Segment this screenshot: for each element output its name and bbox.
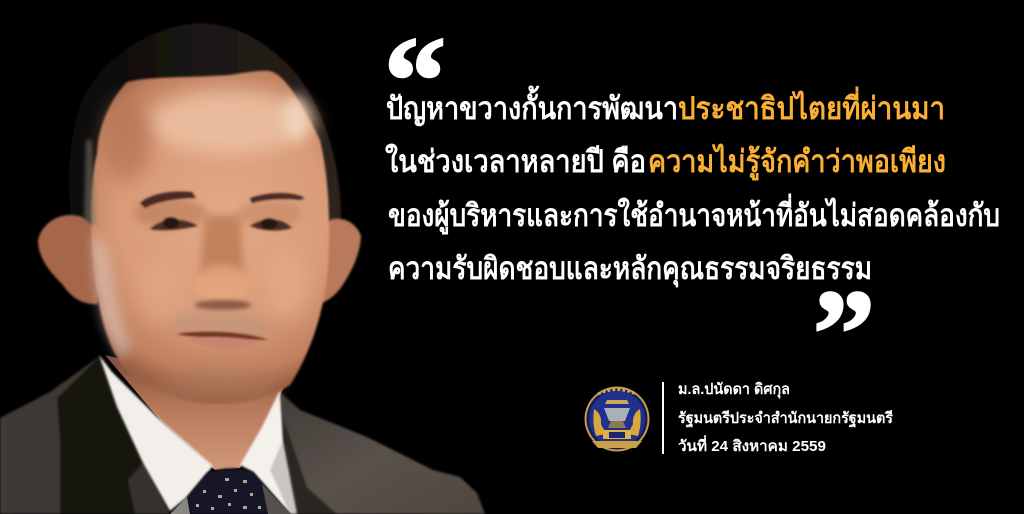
speaker name: ม.ล.ปนัดดา ดิศกุล xyxy=(678,380,790,399)
right eyebrow xyxy=(250,193,305,203)
portrait of the speaker xyxy=(0,23,485,514)
government seal xyxy=(584,386,650,452)
face xyxy=(91,71,329,404)
left eye xyxy=(150,218,198,230)
quote line 1: ปัญหาขวางกั้นการพัฒนา xyxy=(386,85,678,127)
opening quotation mark: “ xyxy=(384,12,446,149)
quote line 2: ในช่วงเวลาหลายปี คือ xyxy=(385,143,646,179)
quotation text xyxy=(385,85,1000,288)
date: วันที่ 24 สิงหาคม 2559 xyxy=(678,435,826,455)
neck xyxy=(105,355,285,470)
suit jacket xyxy=(0,356,485,514)
mouth xyxy=(176,332,268,349)
facial shading xyxy=(84,90,315,398)
quote line 2 highlight: ความไม่รู้จักคำว่าพอเพียง xyxy=(648,143,946,181)
left ear xyxy=(38,215,100,304)
speaker position: รัฐมนตรีประจำสำนักนายกรัฐมนตรี xyxy=(678,410,894,428)
shirt collar xyxy=(99,355,297,514)
left eyebrow xyxy=(140,191,196,208)
hair xyxy=(69,23,341,240)
closing quotation mark: ” xyxy=(813,265,875,402)
attribution xyxy=(678,380,894,455)
right eye xyxy=(250,218,292,230)
quote line 1 highlight: ประชาธิปไตยที่ผ่านมา xyxy=(678,86,945,126)
quote line 4: ความรับผิดชอบและหลักคุณธรรมจริยธรรม xyxy=(388,251,872,288)
right ear xyxy=(316,219,361,304)
necktie xyxy=(170,468,290,514)
divider xyxy=(662,382,664,454)
